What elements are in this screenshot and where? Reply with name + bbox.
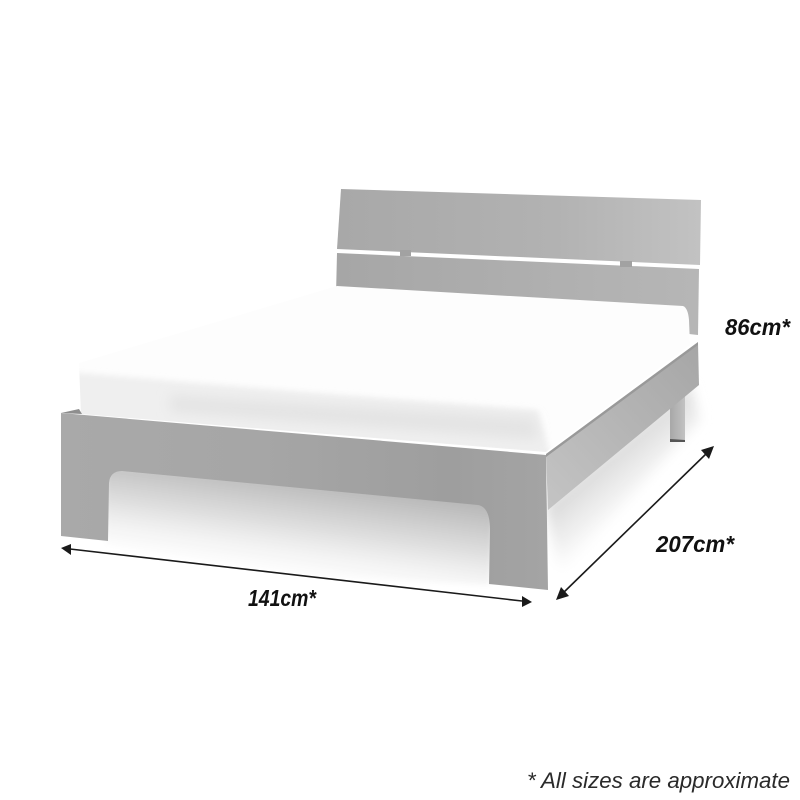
footnote: * All sizes are approximate — [527, 768, 790, 793]
mattress front shading — [80, 374, 548, 452]
headboard connector left — [400, 250, 411, 256]
side rail top edge — [546, 342, 698, 457]
headboard lower panel — [336, 253, 699, 335]
arrow: length — [556, 446, 714, 600]
rear leg — [670, 385, 685, 442]
bed frame front — [61, 342, 698, 590]
frame front panel — [61, 413, 548, 590]
label: width: 141cm* — [248, 585, 317, 611]
side rail — [546, 343, 699, 510]
arrow: width — [61, 544, 532, 607]
label: length: 207cm* — [655, 531, 735, 557]
mattress — [80, 286, 690, 452]
headboard connector right — [620, 261, 632, 267]
headboard upper panel — [337, 189, 701, 265]
headboard — [336, 189, 701, 335]
floor shadow — [105, 385, 700, 585]
label: height: 86cm* — [725, 314, 791, 340]
mattress top — [79, 286, 690, 452]
frame inner lip — [61, 409, 82, 414]
